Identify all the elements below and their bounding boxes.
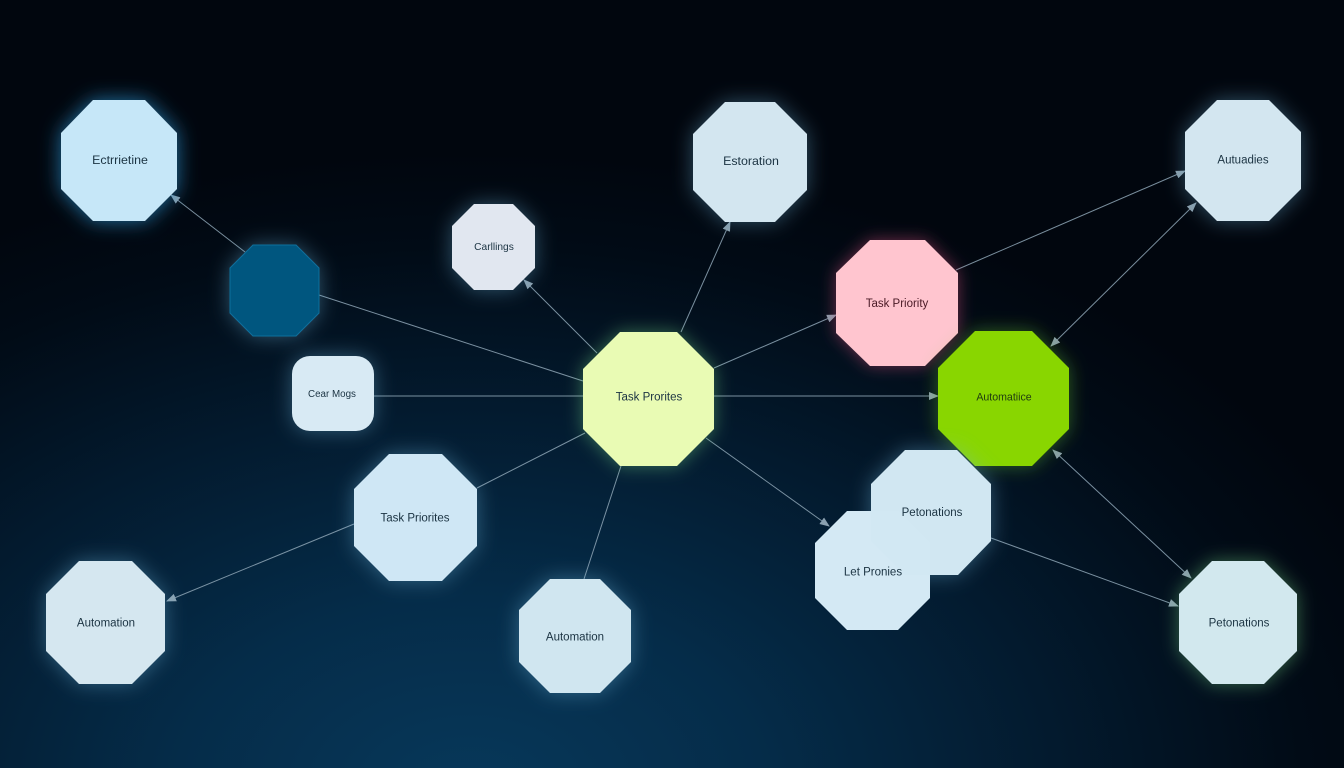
node: Task Priority <box>836 240 958 366</box>
node: Petonations right: Petonations <box>1209 618 1270 630</box>
node: Automation bottom <box>519 579 631 693</box>
node: central Task Prorites <box>583 332 714 466</box>
node: Petonations cluster: Petonations <box>902 507 963 519</box>
node: Automatiice <box>938 331 1069 466</box>
node: Task Priorites lower left: Task Priorites <box>380 512 450 524</box>
node: central Task Prorites: Task Prorites <box>616 392 682 404</box>
node: Estoration <box>693 102 807 222</box>
connector lines and arrows <box>167 171 1196 606</box>
node: Carllings <box>452 204 535 290</box>
node: unlabeled dark blue <box>230 245 319 336</box>
node: Ectrrietine: Ectrrietine <box>92 153 148 167</box>
node: Task Priorites lower left <box>354 454 477 581</box>
node: Automation left <box>46 561 165 684</box>
node: Cear Mogs: Cear Mogs <box>308 389 356 400</box>
node: Petonations cluster <box>815 450 991 630</box>
node: Estoration: Estoration <box>723 154 779 168</box>
node: Task Priority: Task Priority <box>866 298 929 310</box>
node: Automation left: Automation <box>77 618 135 630</box>
node: Cear Mogs <box>292 356 374 431</box>
node: Automatiice: Automatiice <box>976 392 1032 404</box>
node: Ectrrietine <box>61 100 177 221</box>
node: Autuadies: Autuadies <box>1217 154 1269 166</box>
node: Automation bottom: Automation <box>546 632 604 644</box>
node: Carllings: Carllings <box>474 242 514 253</box>
node: Petonations right <box>1179 561 1297 684</box>
node: Petonations cluster: Let Pronies <box>844 566 902 578</box>
node: Autuadies <box>1185 100 1301 221</box>
